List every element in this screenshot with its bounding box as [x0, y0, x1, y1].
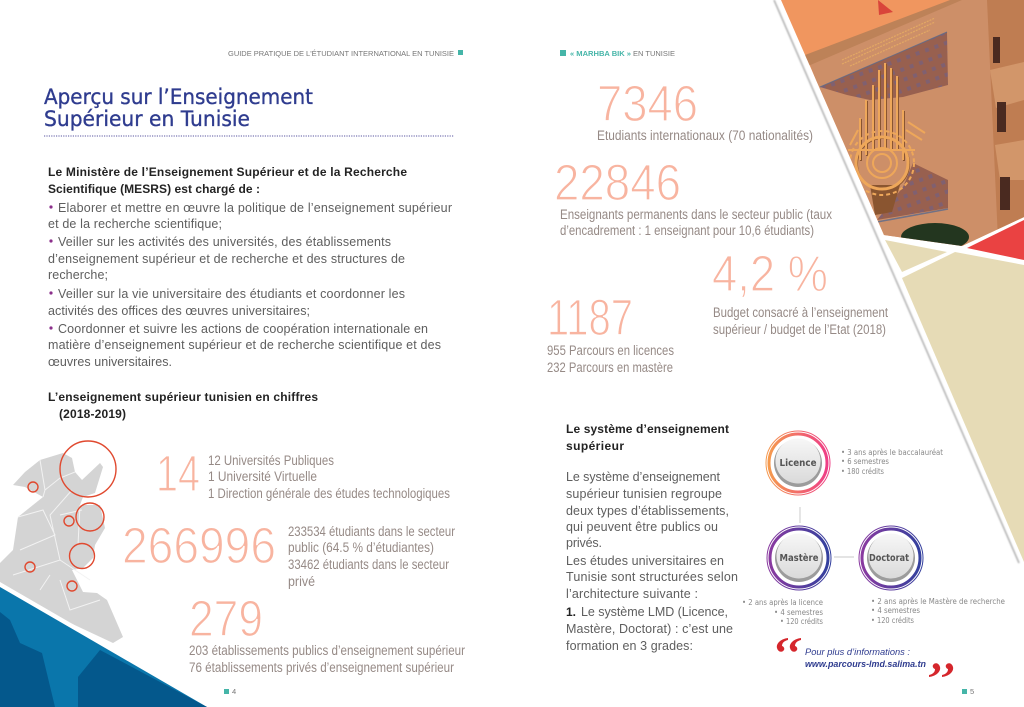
stat: 14 universities: 14 [156, 445, 200, 502]
node: Mastère [767, 526, 831, 590]
node: Doctorat: Doctorat [869, 553, 909, 564]
stat: 4,2 % budget [712, 245, 888, 337]
callout: more information [777, 638, 953, 677]
red triangle [967, 220, 1024, 260]
trees [901, 223, 969, 246]
stat: 14 universities: 12 Universités Publiques [208, 453, 334, 468]
stat: 7346 international students [597, 75, 813, 143]
node: Doctorat [859, 526, 923, 590]
stat: 7346 international students: 7346 [597, 75, 698, 132]
title: Supérieur en Tunisie [44, 107, 250, 131]
text block: higher education system [566, 422, 738, 653]
Licence details: • 6 semestres [841, 457, 889, 466]
stat: 279 institutions [189, 590, 465, 675]
stat: 14 universities: 1 Direction générale des études technologiques [208, 486, 450, 501]
stat: 1187 programmes [547, 289, 674, 375]
photo: ministry building [780, 0, 1024, 251]
Licence details: • 180 crédits [841, 467, 884, 476]
flag [878, 0, 893, 15]
page number 5 [962, 687, 974, 696]
LMD diagram [742, 431, 1005, 626]
Doctorat details: • 120 crédits [871, 616, 914, 625]
text block: higher education system: supérieur [566, 439, 624, 453]
text block: ministry missions: Veiller sur la vie universitaire des étudiants et coordonner les [58, 287, 405, 301]
stat: 266996 students: privé [288, 574, 315, 589]
title: Aperçu sur l’Enseignement [44, 85, 313, 109]
stat: 266996 students: 233534 étudiants dans le secteur [288, 524, 455, 539]
stat: 22846 teachers: Enseignants permanents dans le secteur public (taux [560, 207, 832, 222]
connectors [800, 507, 854, 557]
stat: 266996 students [122, 517, 455, 589]
page number 5: 5 [970, 687, 974, 696]
running header right: EN TUNISIE [633, 49, 675, 58]
location circles [25, 441, 116, 591]
title [44, 85, 454, 136]
heading: figures: (2018-2019) [59, 407, 126, 421]
stat: 4,2 % budget: 4,2 % [712, 245, 828, 302]
text block: higher education system: qui peuvent être publics ou [566, 520, 718, 534]
blue corner [0, 587, 207, 707]
text block: higher education system: privés. [566, 536, 602, 550]
stat: 279 institutions: 279 [189, 590, 263, 647]
map outline [0, 453, 123, 643]
text block: ministry missions: recherche; [48, 268, 108, 282]
white band [0, 582, 216, 707]
big tan shape [902, 252, 1024, 562]
stat: 4,2 % budget: supérieur / budget de l’Etat (2018) [713, 322, 886, 337]
small tan shape [885, 240, 947, 272]
page number 4: 4 [232, 687, 236, 696]
heading: figures [48, 390, 318, 421]
stat: 22846 teachers: 22846 [554, 154, 681, 211]
Doctorat details [871, 597, 1005, 625]
text block: higher education system: Le système d’enseignement [566, 470, 721, 484]
diagonal shadow [774, 0, 1019, 563]
text block: higher education system: Le système LMD (Licence, [581, 605, 728, 619]
Mastère details: • 2 ans après la licence [742, 598, 823, 607]
text block: ministry missions: Coordonner et suivre les actions de coopération internationale en [58, 322, 428, 336]
stat: 279 institutions: 76 établissements privés d’enseignement supérieur [189, 660, 454, 675]
Mastère details [742, 598, 823, 626]
text block: ministry missions: Le Ministère de l’Enseignement Supérieur et de la Recherche [48, 165, 407, 179]
text block: ministry missions: matière d’enseignement supérieur et de recherche scientifique et des [48, 338, 441, 352]
windows [993, 37, 1000, 63]
stat: 14 universities [156, 445, 450, 502]
map of Tunisia with blue corner [0, 441, 216, 707]
stat: 4,2 % budget: Budget consacré à l’enseignement [713, 305, 888, 320]
stat: 1187 programmes: 1187 [547, 289, 633, 346]
stat: 279 institutions: 203 établissements publics d’enseignement supérieur [189, 643, 465, 658]
icon: closing quotes [929, 663, 953, 677]
node: Licence [766, 431, 830, 495]
stat: 22846 teachers [554, 154, 832, 238]
stat: 7346 international students: Etudiants internationaux (70 nationalités) [597, 128, 813, 143]
text block: ministry missions: œuvres universitaires. [48, 355, 172, 369]
Doctorat details: • 4 semestres [871, 606, 920, 615]
mosaic bands [820, 32, 948, 100]
text block: higher education system: supérieur tunisien regroupe [566, 487, 722, 501]
heading: figures: L’enseignement supérieur tunisien en chiffres [48, 390, 318, 404]
text block: higher education system: formation en 3 grades: [566, 639, 693, 653]
Mastère details: • 4 semestres [774, 608, 823, 617]
text block: higher education system: Le système d’enseignement [566, 422, 729, 436]
stat: 1187 programmes: 955 Parcours en licences [547, 343, 674, 358]
node: Licence: Licence [780, 458, 817, 469]
icon: opening quotes [777, 638, 801, 652]
Doctorat details: • 2 ans après le Mastère de recherche [871, 597, 1005, 606]
text block: ministry missions: Veiller sur les activités des universités, des établissements [58, 235, 391, 249]
running header left: GUIDE PRATIQUE DE L'ÉTUDIANT INTERNATIONAL EN TUNISIE [228, 49, 454, 58]
stat: 266996 students: 266996 [122, 517, 276, 574]
text block: ministry missions: Elaborer et mettre en œuvre la politique de l’enseignement supérieur [58, 201, 452, 215]
stat: 1187 programmes: 232 Parcours en mastère [547, 360, 673, 375]
running header right [560, 49, 675, 58]
text block: ministry missions: activités des offices des œuvres universitaires; [48, 304, 310, 318]
stat: 22846 teachers: d’encadrement : 1 enseignant pour 10,6 étudiants) [560, 223, 814, 238]
text block: ministry missions: et de la recherche scientifique; [48, 217, 222, 231]
text block: higher education system: Les études universitaires en [566, 554, 724, 568]
node: Mastère: Mastère [780, 552, 819, 564]
inscription [842, 18, 935, 66]
text block: higher education system: 1. [566, 605, 576, 619]
callout: more information: Pour plus d’informations : [805, 647, 911, 657]
stat: 14 universities: 1 Université Virtuelle [208, 469, 317, 484]
text block: ministry missions: Scientifique (MESRS) est chargé de : [48, 182, 260, 196]
emblem [870, 185, 900, 215]
text block: higher education system: Mastère, Doctorat) : c’est une [566, 622, 733, 636]
Mastère details: • 120 crédits [780, 617, 823, 626]
page number 4 [224, 687, 236, 696]
text block: higher education system: l’architecture suivante : [566, 587, 698, 601]
text block: higher education system: Tunisie sont structurées selon [566, 570, 738, 584]
Licence details: • 3 ans après le baccalauréat [841, 448, 943, 457]
region borders [13, 460, 100, 610]
text block: ministry missions [48, 165, 452, 369]
stat: 266996 students: public (64.5 % d’étudiantes) [288, 540, 434, 555]
callout: more information: www.parcours-lmd.salima.tn [805, 659, 926, 669]
running header right: « MARHBA BIK » [570, 49, 631, 58]
Licence details [841, 448, 943, 476]
stat: 266996 students: 33462 étudiants dans le secteur [288, 557, 449, 572]
text block: higher education system: deux types d’établissements, [566, 504, 729, 518]
text block: ministry missions: d’enseignement supérieur et de recherche et des structures de [48, 252, 405, 266]
corner decoration: top right photo and colour shapes [774, 0, 1024, 563]
